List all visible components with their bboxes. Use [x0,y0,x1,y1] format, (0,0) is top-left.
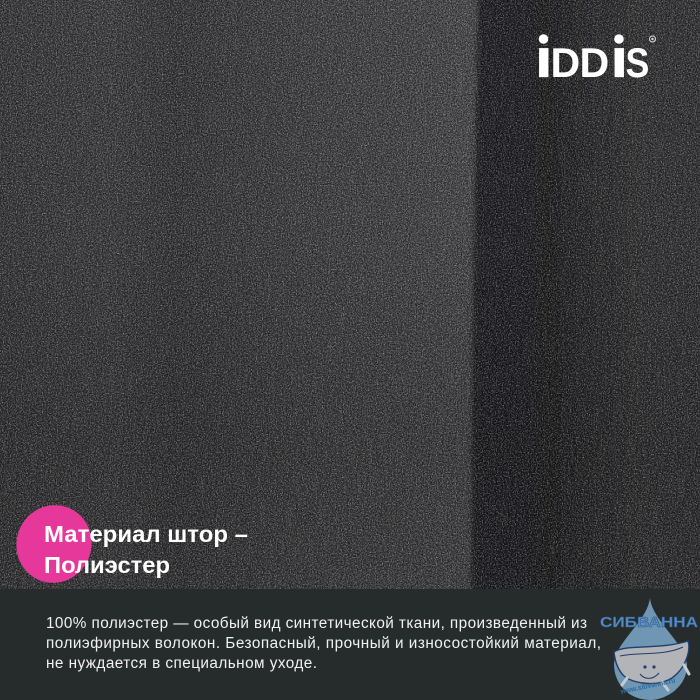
description text: 100% полиэстер — особый вид синтетической ткани, произведенный из [46,615,587,632]
icon: water drop [614,598,687,700]
description text: не нуждается в специальном уходе. [46,655,317,672]
logo: IDDIS: D [550,39,580,86]
description text: полиэфирных волокон. Безопасный, прочный и износостойкий материал, [46,635,601,652]
website: www.sibvanna.ru [619,675,677,696]
logo: IDDIS: I [610,40,628,86]
logo: IDDIS [535,34,656,87]
logo: IDDIS: D [580,39,609,86]
accent: pink circle [5,495,103,593]
bottom panel [0,589,700,700]
heading: material: Материал штор – [44,521,248,547]
logo: IDDIS: S [626,40,649,87]
brand name: СИБВАННА [600,615,699,631]
heading: material: Полиэстер [44,552,170,578]
heading: material [44,521,248,578]
watermark: Sibvanna logo [600,598,699,700]
icon: bathtub [614,641,689,690]
logo: IDDIS: I [535,40,553,86]
description text [46,615,601,672]
